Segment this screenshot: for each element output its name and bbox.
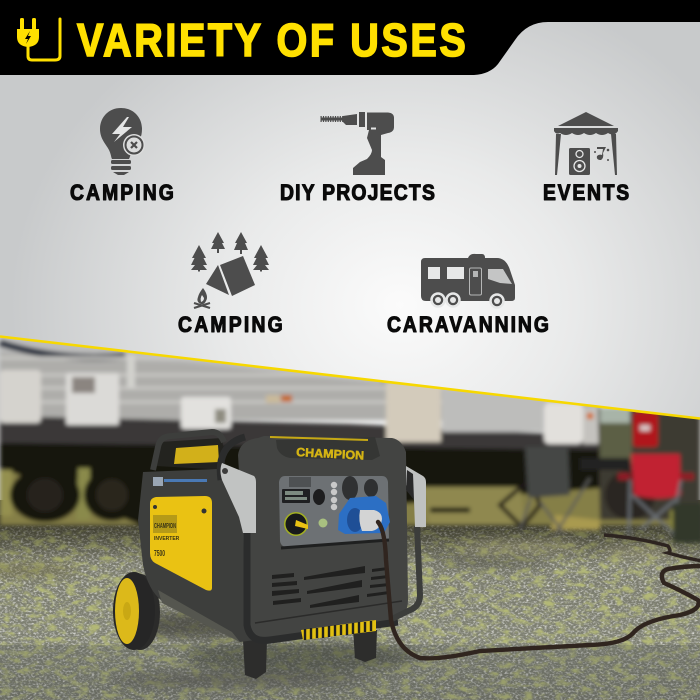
badge strip: [153, 477, 207, 486]
grey chair: [525, 447, 570, 498]
truck: [598, 408, 700, 520]
indicator light: [318, 518, 328, 528]
right metal bracket: [406, 466, 426, 527]
icon: motorhome: [421, 254, 515, 308]
jack: [430, 508, 470, 512]
yellow diagonal line: [0, 336, 700, 418]
undercarriage: [158, 590, 240, 642]
carry handle: [153, 432, 224, 470]
blue socket: [338, 496, 390, 534]
icon: trees, tent and campfire: [191, 232, 269, 308]
power cord: [378, 522, 700, 658]
trailer wheels: [10, 468, 80, 522]
yellow striped handle: [301, 620, 376, 640]
storage box: [673, 503, 700, 543]
icon: drill: [320, 112, 394, 175]
label: caravanning: CARAVANNING: [387, 313, 549, 337]
use: camping light bulb: [70, 108, 174, 205]
wheel: [113, 572, 160, 650]
ground with gravel: [0, 500, 700, 700]
red chair: [631, 454, 681, 498]
front housing: [238, 436, 408, 640]
label: DIY projects: DIY PROJECTS: [280, 181, 435, 205]
side panel branding: INVERTER: [154, 536, 180, 542]
control panel: [279, 476, 389, 548]
handle recess: [156, 438, 226, 470]
side body: [138, 469, 255, 642]
blurred trailer background: [0, 338, 700, 543]
icon: plug and cord: [17, 18, 60, 60]
frame tube left: [220, 437, 398, 640]
lid with logo: [270, 437, 380, 463]
yellow side panel: [150, 496, 212, 591]
shadow under generator: [185, 641, 415, 673]
vents: [272, 566, 389, 608]
side panel branding: [153, 505, 206, 558]
right frame tube: [392, 526, 420, 619]
photo: campsite scene: [0, 338, 700, 700]
label: camping: CAMPING: [70, 181, 174, 205]
header banner: [0, 0, 700, 75]
bottom lip: [255, 601, 402, 623]
side panel branding: 7500: [154, 549, 165, 558]
use: events: [543, 112, 629, 205]
use: caravanning: [387, 254, 549, 337]
generator: [113, 432, 700, 679]
left metal bracket: [220, 463, 256, 533]
icon: canopy tent with speaker: [554, 112, 618, 175]
use: DIY projects: [280, 112, 435, 205]
icon: light bulb: [100, 108, 145, 175]
use: camping tent: [178, 232, 283, 337]
side panel branding: CHAMPION: [154, 523, 176, 530]
rotary switch: [284, 512, 308, 536]
title: VARIETY OF USES: [77, 15, 466, 67]
label: camping: CAMPING: [178, 313, 283, 337]
lid with logo: CHAMPION: [296, 445, 364, 463]
yellow top cover: [174, 445, 219, 464]
rear foot and front feet: [243, 630, 377, 679]
grass gaps: [0, 470, 12, 516]
label: events: EVENTS: [543, 181, 629, 205]
sunlit patches on ground: [0, 543, 680, 687]
extension cord in background: [604, 535, 700, 561]
